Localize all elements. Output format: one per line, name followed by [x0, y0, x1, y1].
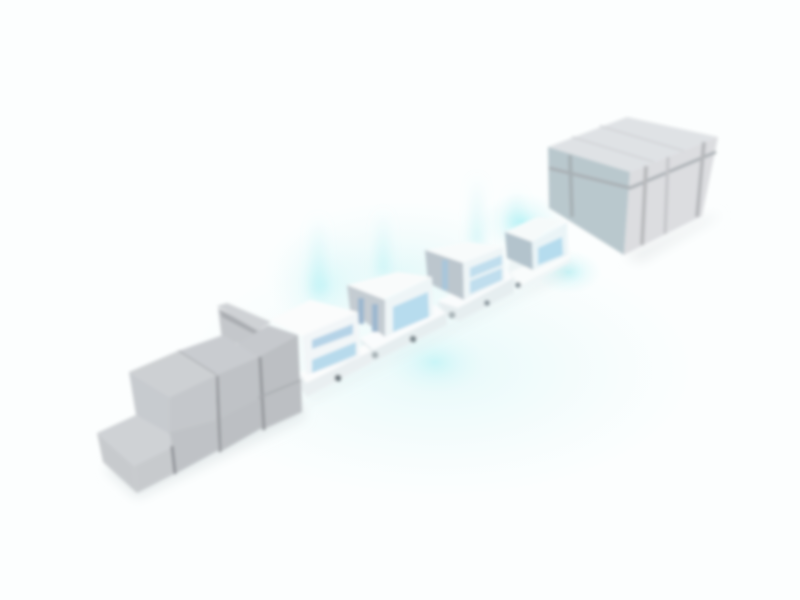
cart 2 — [347, 272, 447, 362]
rear column — [236, 325, 302, 430]
middle column — [178, 335, 262, 452]
floor shadows — [104, 214, 722, 498]
large stacked crate — [548, 117, 718, 255]
lower box beneath — [168, 420, 219, 474]
bracket on top of stack — [217, 303, 271, 350]
background glow — [180, 175, 700, 500]
cart 4 — [505, 217, 570, 290]
upper front box — [129, 351, 217, 436]
cart 3 — [425, 242, 514, 321]
cart 1 — [270, 300, 372, 397]
low front box — [97, 415, 175, 493]
grey box stack — [97, 303, 302, 493]
